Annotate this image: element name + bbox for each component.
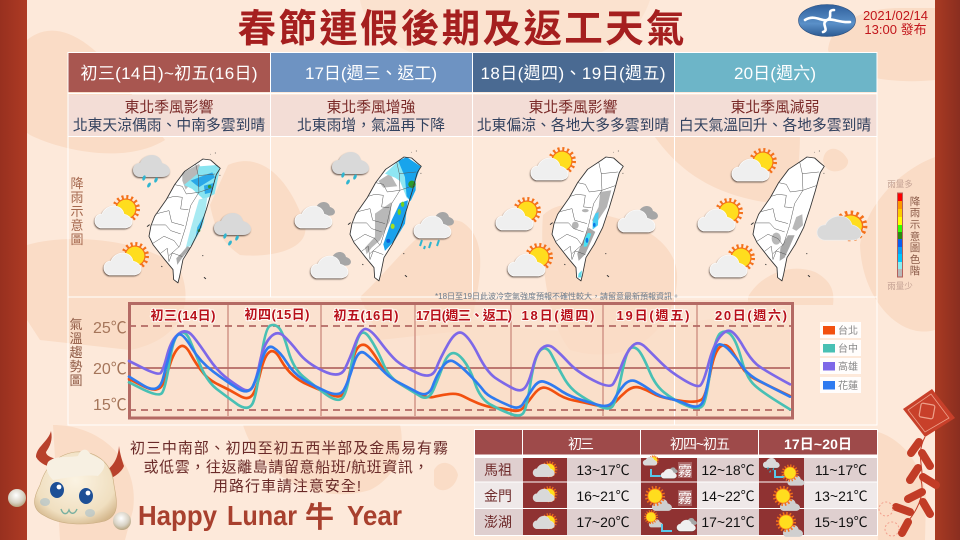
rainfall legend: [887, 179, 921, 291]
red diamond ornament: [903, 389, 955, 437]
legend: 台中: 台中: [838, 342, 858, 355]
weather icons: column 4: [698, 150, 865, 277]
summary: column 2: [297, 99, 445, 134]
string: [905, 437, 925, 525]
date labels: 18日(週四): [522, 308, 594, 323]
gridlines: [129, 304, 793, 418]
legend caption: 意: [910, 230, 920, 243]
temperatures: 14~22℃: [701, 488, 755, 504]
header: 20日: [675, 53, 877, 92]
map: rain 18-19: [550, 151, 623, 281]
date labels: 初三(14日): [150, 308, 216, 323]
temperatures: 16~21℃: [576, 488, 630, 504]
legend: 台北: 台北: [838, 324, 858, 337]
title: 春節連假後期及返工天氣: [238, 8, 684, 51]
rainfall label: [70, 176, 84, 247]
header: 17日: [271, 53, 472, 92]
summary row: [68, 95, 877, 136]
summary: column 1: 東北季風影響: [125, 98, 214, 116]
legend caption: 色: [910, 253, 921, 266]
ox mascot: [8, 431, 131, 530]
pearl left: [8, 489, 26, 507]
axis labels: 15℃: [93, 397, 127, 414]
legend caption: 階: [910, 265, 921, 277]
date labels: [150, 307, 787, 323]
logo: weather bureau: [798, 4, 856, 36]
map: rain 20: [751, 151, 824, 281]
column 2 row 2 icons: [647, 488, 692, 511]
temperatures: 17~21℃: [701, 514, 755, 530]
notice text: [130, 440, 448, 495]
weather icons: column 1: [95, 155, 251, 275]
temperatures: 17~20℃: [576, 514, 630, 530]
axis labels: 20℃: [93, 361, 127, 378]
ox cheeks: [40, 498, 95, 517]
greeting: Lunar: [227, 500, 297, 531]
temperatures: 11~17℃: [815, 462, 867, 478]
rainfall label: 意: [70, 218, 84, 233]
summary: column 1: 北東天涼偶雨、中南多雲到晴: [73, 116, 265, 134]
summary: column 2: 北東雨增，氣溫再下降: [297, 117, 445, 134]
notice text: 用路行車請注意安全!: [213, 477, 361, 495]
date labels: 初四(15日): [244, 307, 310, 322]
header: 18日 19日: 18日(週四)、19日(週五): [480, 64, 666, 83]
island names: 金門: [484, 488, 512, 504]
summary: column 4: 東北季風減弱: [731, 99, 819, 116]
data lines: [129, 325, 790, 416]
rainfall label: 降: [70, 176, 84, 191]
rainfall label: 圖: [70, 232, 84, 247]
header labels: 初四~初五: [670, 436, 730, 452]
issue date: [863, 8, 928, 37]
line: 花蓮: [129, 334, 790, 408]
pearl right: [113, 512, 131, 530]
axis labels: 25℃: [93, 320, 127, 337]
legend caption: [910, 195, 921, 277]
legend caption: 降: [910, 195, 921, 208]
rainfall label: 示: [70, 204, 84, 219]
colour scale: [898, 193, 902, 277]
column 2 row 3 icons: [645, 511, 697, 531]
island names: [484, 462, 512, 530]
line: 高雄: [129, 329, 790, 390]
chart label: 勢: [69, 359, 83, 374]
footnote: *18日至19日此波冷空氣強度預報不確性較大，請留意最新預報資訊。: [435, 291, 680, 301]
ox mouth: [61, 509, 77, 514]
map: rain 14-16: [147, 153, 220, 283]
issue date: 2021/02/14: [863, 8, 928, 23]
weather icons: column 2: [295, 152, 454, 278]
table header: [475, 430, 877, 454]
header: 初三~初五: [68, 53, 270, 92]
temperature trend chart: [93, 304, 793, 418]
legend caption: 圖: [910, 242, 920, 254]
chart label: 溫: [69, 331, 83, 346]
column headers: [68, 53, 877, 92]
greeting: [138, 500, 402, 534]
column 3 icons: [763, 458, 804, 537]
chart label: 趨: [69, 345, 83, 360]
legend caption: 雨: [910, 207, 920, 219]
legend: 花蓮: 花蓮: [838, 379, 858, 392]
icon: gray cloud with sun: [817, 213, 865, 240]
horn: left: [36, 431, 60, 468]
column 1 icons: [533, 462, 556, 529]
icon cells: [523, 458, 804, 535]
column 2 row 1 icons: 霧: [678, 463, 692, 479]
icon: rainy cloud: [414, 212, 454, 249]
summary: column 2: 東北季風增強: [327, 99, 416, 116]
rainfall legend: 雨量少: [887, 281, 913, 291]
temperatures: 13~21℃: [814, 488, 868, 504]
greeting: 牛: [305, 501, 334, 534]
column 2 row 2 icons: 霧: [678, 490, 692, 506]
rainfall legend: 雨量多: [887, 179, 913, 189]
temperatures: [576, 462, 868, 530]
firecrackers: [879, 389, 955, 536]
header: 18日 19日: [473, 53, 674, 92]
map: rain 17: [348, 151, 421, 281]
legend: 高雄: 高雄: [838, 360, 858, 373]
summary: column 1: [73, 98, 265, 134]
temperatures: 13~17℃: [576, 462, 630, 478]
date labels: 20日(週六): [715, 308, 787, 323]
island names: 馬祖: [484, 462, 512, 478]
ox eye left: [50, 482, 64, 498]
date labels: 19日(週五): [616, 308, 690, 323]
summary: column 3: 北東偏涼、各地大多多雲到晴: [477, 116, 669, 134]
summary: column 4: 白天氣溫回升、各地多雲到晴: [679, 116, 871, 134]
date labels: 初五(16日): [334, 308, 398, 323]
chart legend: [820, 322, 861, 393]
left side bar: [0, 0, 27, 540]
ox cap: [47, 450, 104, 480]
summary: column 3: 東北季風影響: [529, 98, 618, 116]
column 2 row 1 icons: [643, 456, 692, 479]
chart label: 圖: [69, 373, 83, 388]
line: 台中: [129, 325, 790, 416]
table grid lines: [68, 52, 877, 425]
header labels: [568, 436, 852, 452]
axis labels: [93, 320, 127, 414]
header: 初三~初五: 初三(14日)~初五(16日): [80, 64, 258, 83]
temperatures: 15~19℃: [814, 514, 868, 530]
horn: right: [100, 446, 124, 481]
ox eye right: [79, 488, 93, 504]
chart label: 氣: [69, 317, 83, 332]
ox body: [35, 452, 116, 524]
temperatures: 12~18℃: [701, 462, 755, 478]
line: 台北: [129, 345, 790, 411]
header labels: 17日~20日: [784, 436, 852, 452]
issue date: 13:00 發布: [864, 22, 927, 37]
header: 20日: 20日(週六): [734, 64, 816, 83]
notice text: 初三中南部、初四至初五西半部及金馬易有霧: [130, 440, 448, 457]
summary: column 4: [679, 99, 871, 134]
rainfall label: 雨: [70, 190, 84, 205]
summary: column 3: [477, 98, 669, 134]
right side bar: [935, 0, 960, 540]
header: 17日: 17日(週三、返工): [305, 64, 437, 83]
notice text: 或低雲，往返離島請留意船班/航班資訊，: [144, 458, 428, 476]
greeting: Year: [347, 500, 402, 531]
weather icons: column 3: [496, 149, 658, 276]
row backgrounds: [475, 458, 877, 535]
crackers: [896, 442, 936, 533]
legend caption: 示: [910, 219, 921, 231]
island names: 澎湖: [484, 514, 512, 530]
chart label: [69, 317, 83, 388]
date labels: 17日(週三、返工): [416, 308, 512, 323]
outlying islands table: [474, 429, 878, 537]
header labels: 初三: [568, 436, 594, 452]
greeting: Happy: [138, 500, 217, 531]
sparks: [879, 502, 899, 536]
